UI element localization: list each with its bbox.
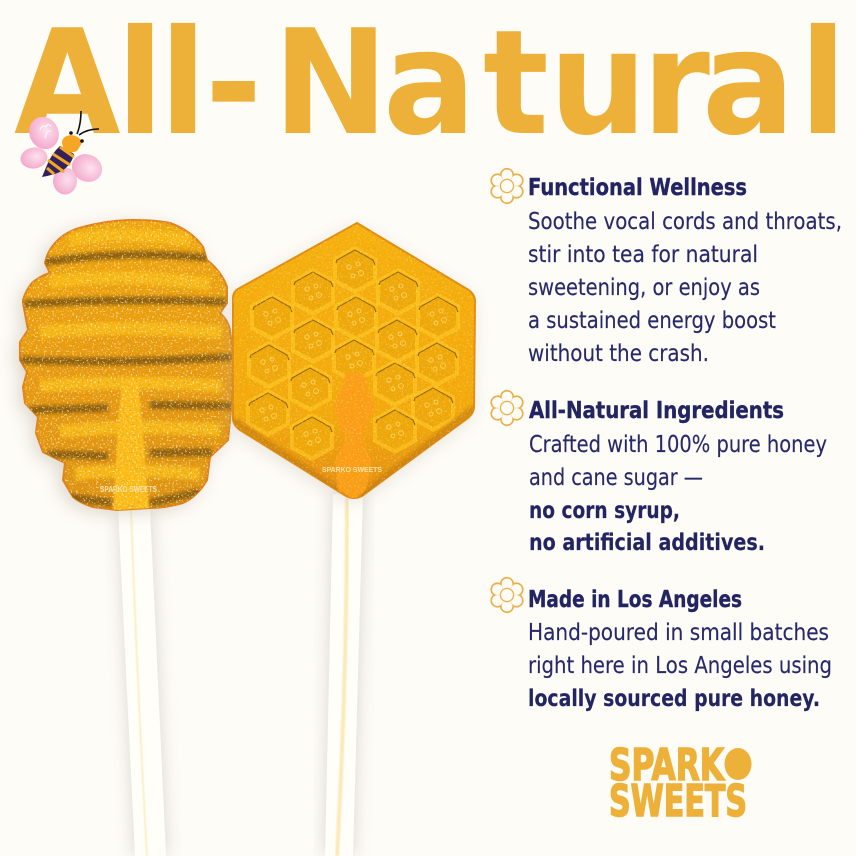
body text: without the crash.: [528, 341, 709, 367]
heading: Made in Los Angeles: [528, 587, 742, 613]
icon: flower: [492, 169, 522, 203]
icon: flower: [492, 578, 522, 612]
hexagon stem: [333, 372, 375, 500]
heading: All-Natural Ingredients: [529, 398, 784, 424]
lollipop: honeycomb hexagon: [228, 218, 480, 856]
hive highlights: [40, 235, 222, 474]
body text: [528, 620, 832, 712]
icon: bee on flower wings: [19, 111, 107, 194]
icon: flower: [492, 391, 522, 425]
title: All-Natural: [14, 0, 847, 168]
honeycomb cells: [246, 246, 460, 461]
logo: sparko sweets: SWEETS: [609, 776, 747, 827]
body text: stir into tea for natural: [528, 242, 758, 268]
heading: Functional Wellness: [528, 175, 747, 201]
hive bubble texture: [15, 215, 237, 515]
body text: [528, 209, 842, 367]
body text: no artificial additives.: [529, 530, 765, 556]
hive ridges: [20, 255, 232, 503]
hexagon bubble texture: [228, 218, 480, 502]
hive stick: [118, 508, 166, 856]
section: functional wellness: [492, 169, 842, 367]
body text: a sustained energy boost: [528, 308, 776, 334]
hive shadow: [15, 224, 228, 514]
hexagon lower edge: [233, 408, 474, 496]
hive stem: [113, 380, 150, 512]
body text: sweetening, or enjoy as: [528, 275, 760, 301]
hive body: [20, 220, 233, 510]
hive brand mark: SPARKO SWEETS: [100, 485, 158, 494]
hexagon stick: [325, 494, 363, 856]
hexagon brand mark: SPARKO SWEETS: [322, 465, 382, 474]
body text: no corn syrup,: [529, 498, 680, 524]
hexagon body: [233, 223, 475, 498]
section: made in los angeles: [492, 578, 832, 712]
logo: sparko sweets: SPARK: [609, 740, 725, 791]
lollipop: beehive: [15, 215, 237, 856]
section: all-natural ingredients: [492, 391, 827, 556]
hexagon shadow: [231, 227, 473, 502]
body text: [529, 432, 827, 556]
body text: and cane sugar —: [529, 465, 703, 491]
logo: sparko sweets: [609, 740, 752, 827]
